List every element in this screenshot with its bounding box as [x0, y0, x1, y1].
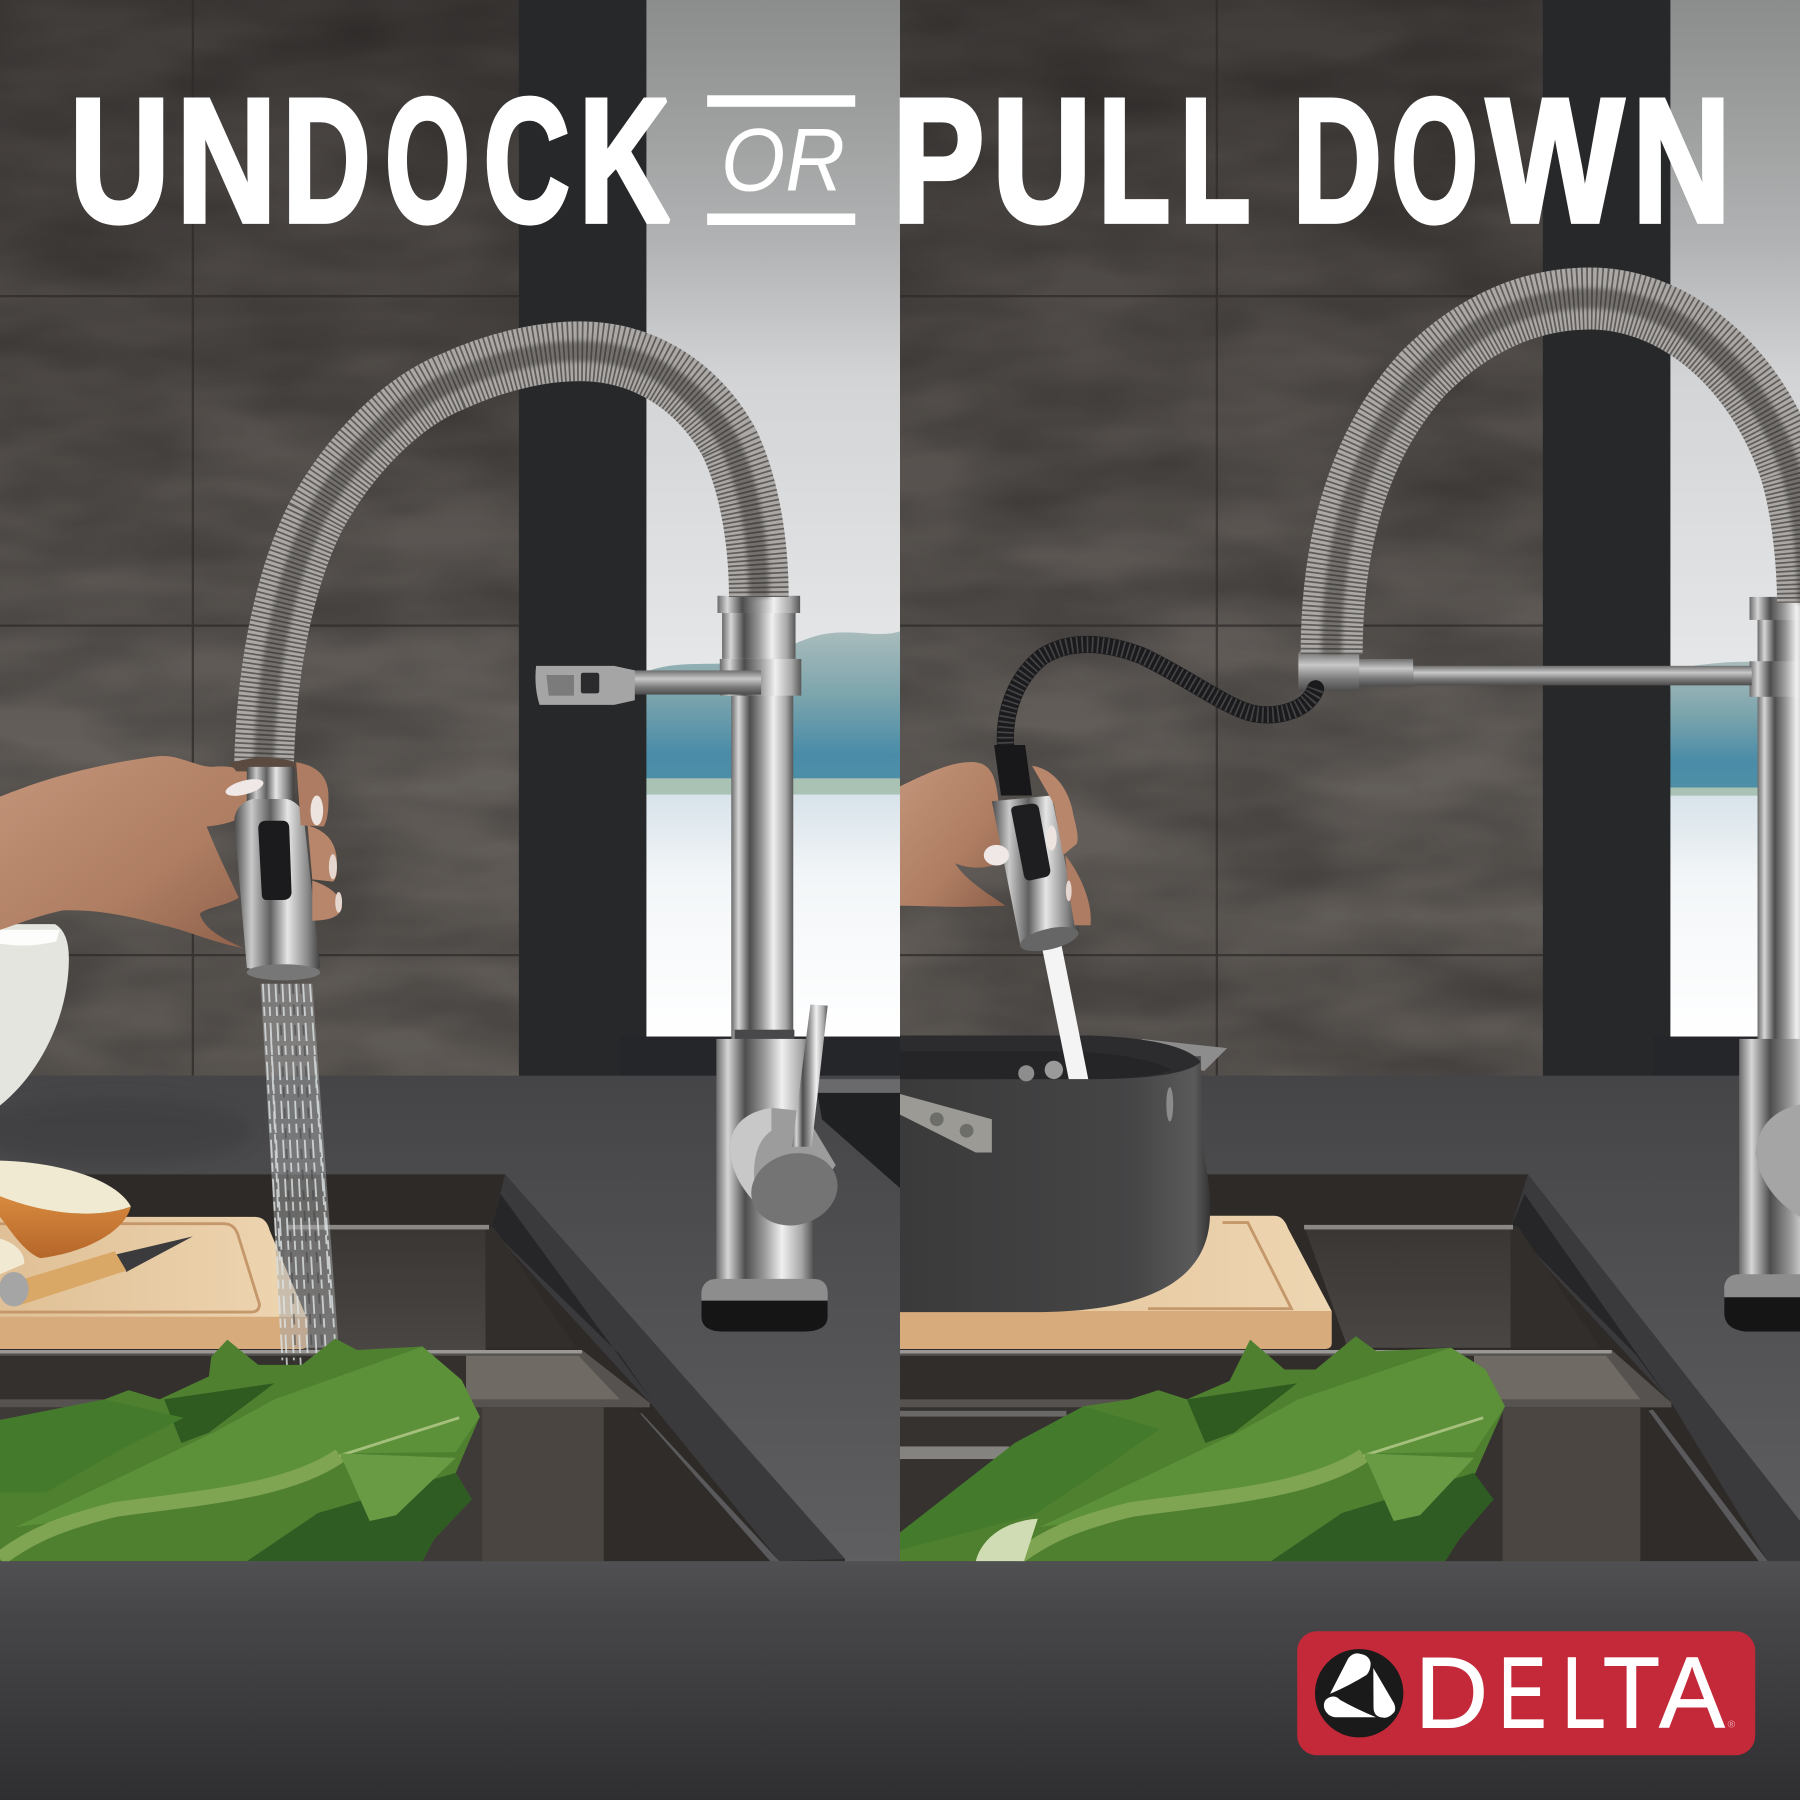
sink	[900, 1174, 1800, 1561]
pot	[900, 1035, 1227, 1312]
bowl	[0, 924, 69, 1105]
cutting board	[900, 1216, 1332, 1349]
wordmark: L	[1562, 1638, 1606, 1750]
divider word: OR	[707, 95, 855, 225]
heading: PULL DOWN: P	[893, 62, 984, 259]
background: tiled wall	[0, 0, 528, 1079]
logo background	[1297, 1631, 1755, 1755]
heading: PULL DOWN: N	[1632, 62, 1731, 259]
lettuce	[900, 1336, 1505, 1561]
faucet: dock arm	[1298, 651, 1752, 691]
faucet: coiled spring neck	[1332, 298, 1800, 654]
knife	[0, 1236, 193, 1306]
registered mark: ®	[1728, 1720, 1736, 1731]
heading: UNDOCK: U	[70, 62, 170, 259]
heading: PULL DOWN: L	[1180, 62, 1251, 259]
wordmark: T	[1603, 1638, 1660, 1750]
lettuce	[0, 1339, 480, 1561]
heading: UNDOCK: D	[283, 62, 371, 259]
heading: UNDOCK: N	[177, 62, 276, 259]
countertop	[0, 1076, 900, 1564]
heading: PULL DOWN: D	[1293, 62, 1382, 259]
heading: PULL DOWN: U	[992, 62, 1091, 259]
heading: PULL DOWN: L	[1098, 62, 1170, 259]
panel: pull down, right kitchen scene	[900, 0, 1800, 1564]
sink	[0, 1174, 845, 1561]
logo mark	[1315, 1649, 1403, 1737]
faucet: dock arm and clamp	[535, 666, 761, 705]
heading: UNDOCK: C	[484, 62, 570, 259]
hand: palm and thumb	[900, 762, 1010, 907]
hand: fingers and nails	[984, 766, 1091, 925]
background: dark window pillar and frame	[519, 0, 900, 1079]
divider word: OR: OR	[721, 110, 845, 210]
wordmark: E	[1498, 1638, 1546, 1750]
panel: undock, left kitchen scene	[0, 0, 900, 1564]
hand: fingers and nails	[224, 762, 342, 921]
wordmark: A	[1659, 1638, 1725, 1750]
title: UNDOCK OR PULL DOWN	[70, 62, 1731, 259]
onion	[0, 1161, 131, 1274]
water stream	[1042, 941, 1088, 1079]
sprayer head	[992, 745, 1081, 956]
cutting board	[0, 1217, 308, 1349]
faucet: black pull-down hose	[1005, 644, 1316, 746]
water spray	[261, 984, 339, 1366]
background: tiled wall	[900, 0, 1554, 1079]
sprayer head	[230, 758, 320, 980]
faucet: coiled spring neck	[264, 351, 759, 763]
background: window with lake view	[1670, 0, 1800, 1037]
heading: PULL DOWN: W	[1487, 62, 1624, 259]
hand: palm and thumb	[0, 756, 266, 948]
faucet: base and column	[701, 596, 846, 1332]
heading: PULL DOWN: O	[1391, 62, 1478, 259]
faucet: base and column	[1724, 597, 1800, 1332]
heading: UNDOCK: K	[579, 62, 670, 259]
background: window with lake view	[646, 0, 900, 1037]
wordmark: D	[1415, 1638, 1488, 1750]
logo: Delta	[1297, 1631, 1755, 1755]
countertop	[1201, 1076, 1800, 1520]
heading: UNDOCK: O	[385, 62, 470, 259]
background: dark window pillar and frame	[1542, 0, 1758, 1076]
front counter strip	[0, 1561, 1800, 1800]
